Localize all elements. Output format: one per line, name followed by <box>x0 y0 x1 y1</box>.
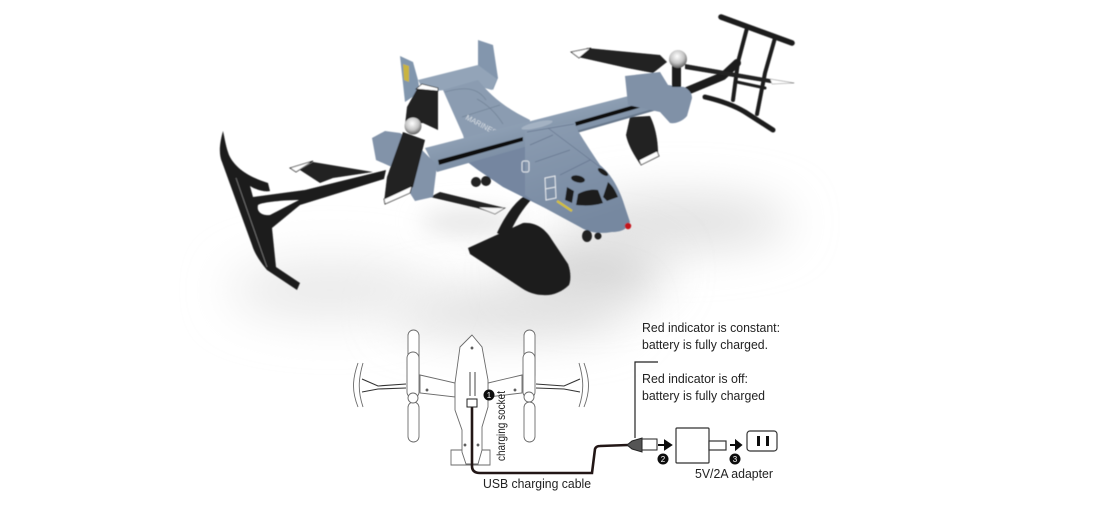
landing gear <box>471 176 602 242</box>
USB cable <box>472 404 628 473</box>
rotor blade, lower left <box>430 192 505 214</box>
tail fins and tailplane <box>400 40 498 102</box>
note: indicator off: Red indicator is off: <box>642 372 748 386</box>
label: charging socket: charging socket <box>494 390 508 461</box>
note: indicator constant: battery is fully charged. <box>642 338 768 352</box>
label: adapter: 5V/2A adapter <box>695 466 774 481</box>
note: indicator off: battery is fully charged <box>642 389 765 403</box>
step badge 1: 1 <box>487 391 492 400</box>
right guard <box>687 17 792 130</box>
note: indicator off <box>642 372 765 403</box>
right rotor blade <box>571 48 667 73</box>
left lower blade <box>384 132 425 204</box>
step badge 2 <box>658 454 668 464</box>
front fuselage <box>521 118 631 233</box>
lower blade, right nacelle <box>626 116 659 165</box>
wall socket <box>747 431 777 451</box>
USB plug <box>627 438 657 452</box>
left spinner <box>404 118 422 134</box>
arrow 2 <box>658 441 671 449</box>
note: indicator constant <box>642 321 780 352</box>
stand <box>468 197 570 295</box>
rear fuselage and belly <box>443 80 560 207</box>
top-view drone outline <box>354 330 588 465</box>
leader line <box>635 362 658 438</box>
yellow arrow <box>557 201 572 211</box>
step badge 1 <box>484 390 494 400</box>
right thin blade <box>685 64 795 84</box>
note: indicator constant: Red indicator is constant: <box>642 321 780 335</box>
wing <box>425 88 665 172</box>
door outline <box>545 176 556 200</box>
left nacelle <box>372 131 437 201</box>
left horizontal blade <box>290 161 373 183</box>
cockpit windows <box>565 167 618 206</box>
charging diagram <box>354 321 780 491</box>
step badge 2: 2 <box>661 455 666 464</box>
red nose light <box>625 223 631 229</box>
left guard and arm <box>220 131 386 290</box>
fuselage text marking: MARINES <box>464 113 498 137</box>
right nacelle and spinner <box>625 50 692 123</box>
step badge 3 <box>730 454 740 464</box>
adapter <box>676 428 726 463</box>
background: soft floor shadows <box>230 198 790 334</box>
drone illustration <box>220 17 795 295</box>
left upper blade <box>405 84 438 130</box>
step badge 3: 3 <box>733 455 738 464</box>
label: USB charging cable: USB charging cable <box>483 476 591 491</box>
arrow 3 <box>730 441 741 449</box>
